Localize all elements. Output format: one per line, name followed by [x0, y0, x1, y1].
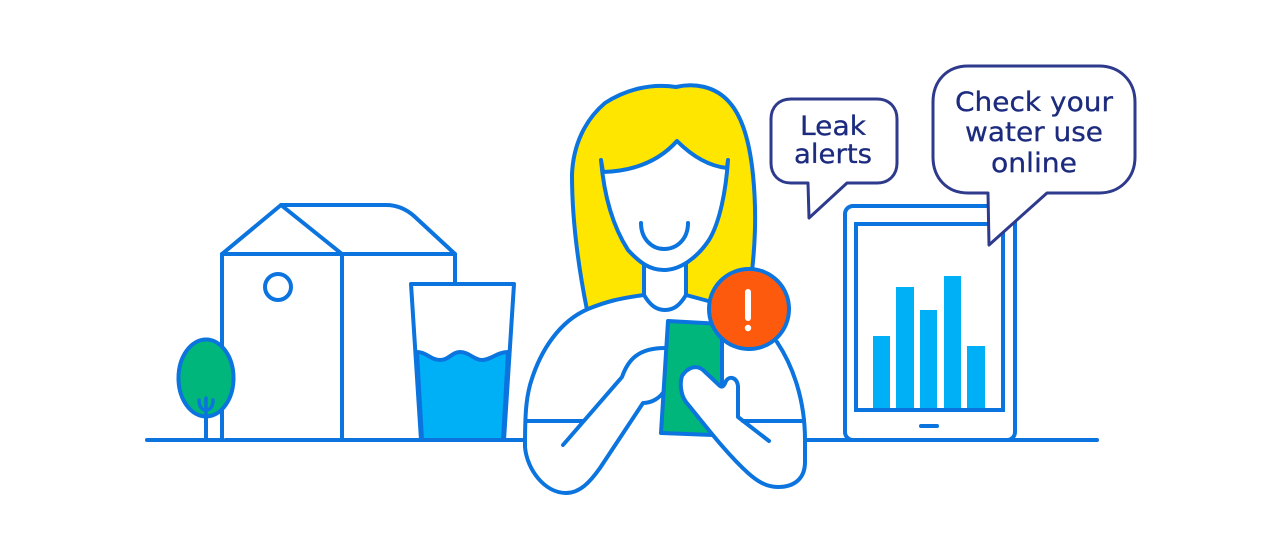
home button [921, 424, 937, 428]
icon: house [222, 205, 455, 440]
icon: tablet with bar chart [845, 206, 1015, 440]
speech bubble: leak alerts [771, 99, 897, 218]
icon: glass of water [411, 284, 514, 440]
left sleeve [527, 419, 583, 423]
right arm and hand [681, 342, 805, 487]
bar chart [873, 276, 985, 408]
speech bubble: leak alerts: alerts [794, 139, 872, 170]
left shoulder and arm outline [525, 295, 665, 493]
icon: house window [265, 274, 291, 300]
speech bubble: check your water use online: water use [965, 117, 1103, 148]
face [601, 141, 728, 270]
hair [572, 85, 755, 310]
neck and collar [644, 262, 686, 310]
speech bubble: leak alerts: Leak [800, 111, 866, 142]
alert badge [709, 269, 789, 349]
body fill [525, 295, 805, 493]
right sleeve [743, 419, 804, 423]
ground line [147, 438, 1097, 442]
speech bubble: check your water use online: online [991, 148, 1077, 179]
speech bubble: check your water use online: Check your [955, 87, 1114, 118]
smile [641, 223, 688, 249]
left arm inner line [563, 348, 665, 445]
phone [661, 321, 722, 435]
person [525, 85, 805, 493]
right shoulder line [686, 295, 712, 302]
icon: tree [178, 340, 234, 440]
speech bubble: check your water use online [933, 66, 1135, 245]
